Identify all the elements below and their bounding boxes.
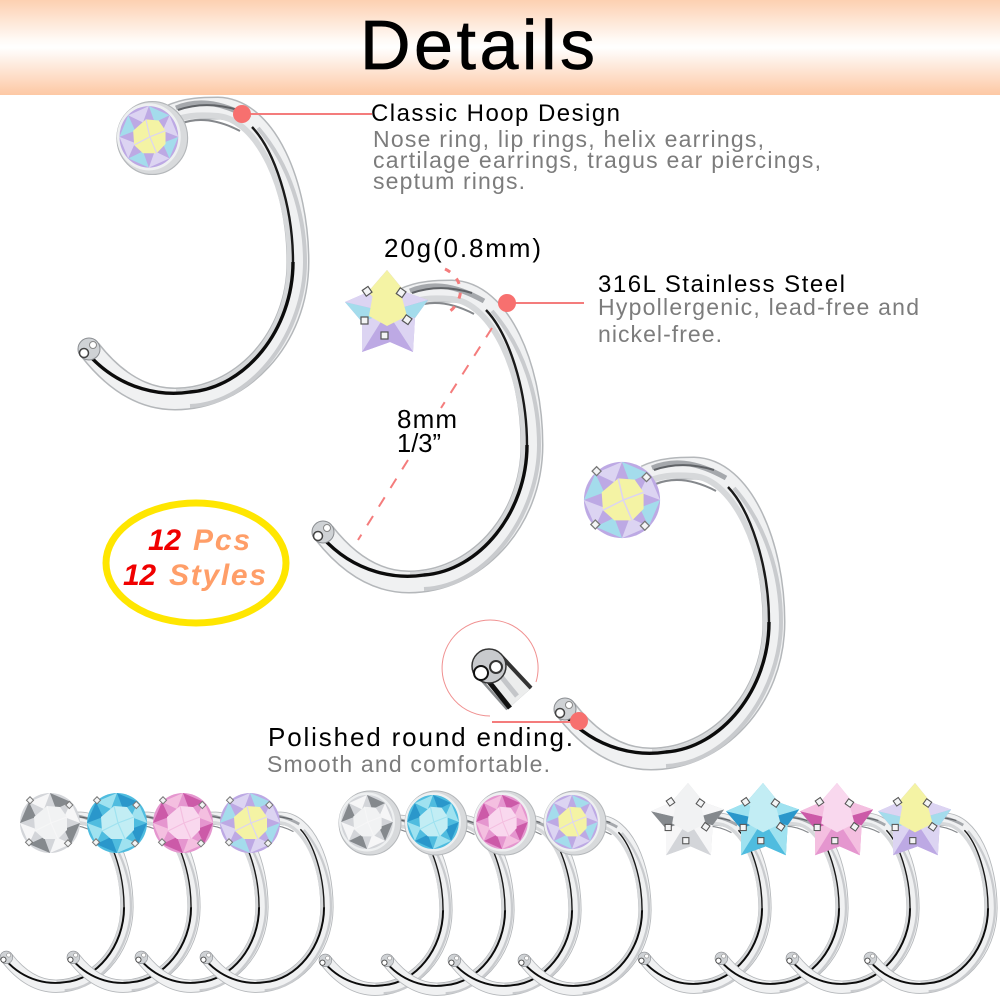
set: bezel round rings: [319, 791, 649, 993]
dimension: 8mm diameter: [358, 328, 492, 540]
steel text: nickel-free.: [598, 321, 722, 347]
callout: 316L stainless steel: [498, 271, 919, 347]
callout text: septum rings.: [373, 168, 525, 194]
title: Details: [360, 6, 595, 84]
steel heading: 316L Stainless Steel: [598, 271, 845, 298]
dimension: gauge 20g: [384, 233, 541, 314]
icon: star gem: [345, 270, 428, 352]
gauge label: 20g(0.8mm): [384, 233, 541, 263]
icon: bezel gem: [117, 102, 188, 174]
magnified round ending: [442, 620, 538, 716]
large hoop with star gem: [312, 270, 539, 589]
dimension: 8mm diameter: 1/3”: [397, 428, 441, 458]
callout text: [373, 126, 821, 194]
large hoop with prong gem: [554, 462, 781, 766]
diameter label: 8mm: [397, 404, 457, 434]
callout heading: Classic Hoop Design: [371, 100, 620, 127]
badge: 12 pcs 12 styles: Pcs: [193, 524, 250, 557]
ending text: Smooth and comfortable.: [267, 751, 550, 777]
steel text: [598, 294, 919, 347]
large hoop with bezel gem: [78, 102, 305, 406]
badge: 12 pcs 12 styles: [106, 503, 286, 623]
badge: 12 pcs 12 styles: Styles: [169, 559, 266, 592]
set: star rings: [638, 783, 995, 991]
callout text: Nose ring, lip rings, helix earrings,: [373, 126, 764, 152]
icon: prong gem: [584, 462, 660, 538]
badge: 12 pcs 12 styles: 12: [123, 559, 156, 592]
callout text: cartilage earrings, tragus ear piercings,: [373, 147, 821, 173]
header band: [0, 0, 1000, 95]
callout: classic hoop design: [233, 100, 821, 194]
set: prong round rings: [0, 793, 331, 990]
ending heading: Polished round ending.: [268, 722, 573, 752]
callout: polished round ending: [267, 712, 588, 777]
badge: 12 pcs 12 styles: 12: [148, 524, 181, 557]
steel text: Hypollergenic, lead-free and: [598, 294, 919, 320]
